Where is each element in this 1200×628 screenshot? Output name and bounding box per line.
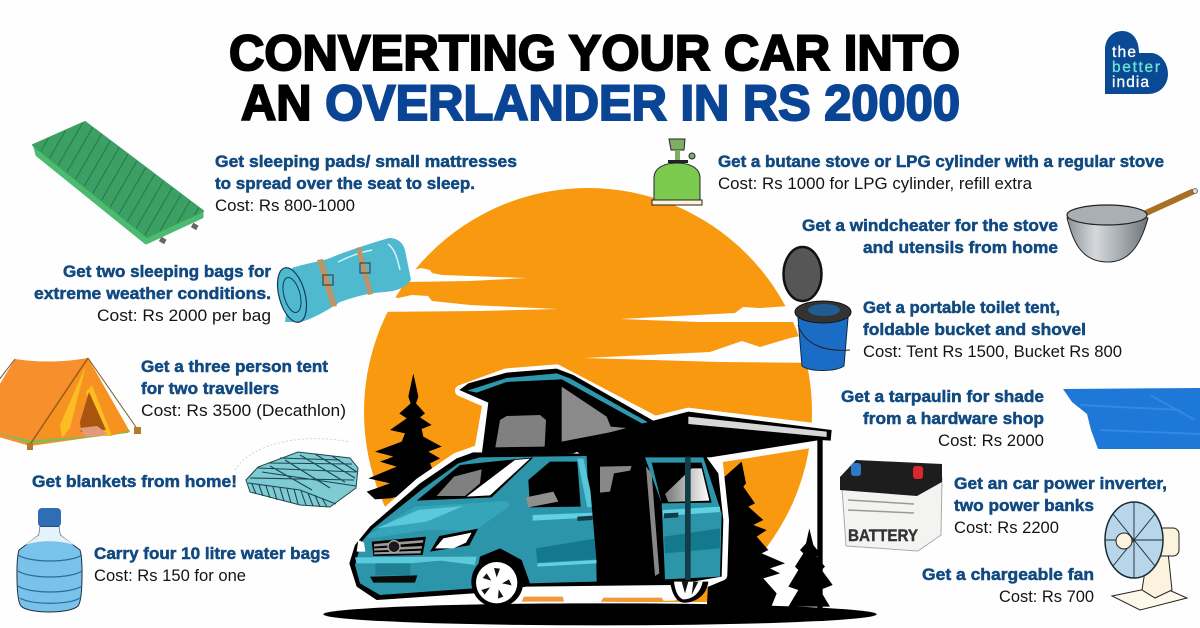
text: stove: Cost: Rs 1000 for LPG cylinder, refill extra [718, 175, 1033, 193]
sun with clouds [364, 188, 820, 628]
title: CONVERTING YOUR CAR INTO [229, 25, 960, 81]
text: water [94, 545, 330, 585]
text: sleeping bags [34, 263, 272, 325]
text: tarpaulin: Get a tarpaulin for shade [841, 388, 1044, 406]
item: sleeping bag [272, 238, 411, 325]
text: sleeping pads: to spread over the seat to sleep. [215, 175, 475, 193]
text: toilet: foldable bucket and shovel [863, 321, 1086, 339]
awning [567, 412, 832, 457]
item: pot [1067, 188, 1198, 262]
item: battery [840, 460, 942, 551]
van body [349, 452, 723, 608]
item: tent [0, 358, 141, 450]
camper van scene [323, 369, 877, 625]
ground shadow [323, 603, 877, 625]
text: fan: Cost: Rs 700 [999, 588, 1094, 606]
text: inverter [954, 475, 1167, 537]
text: inverter: two power banks [954, 497, 1094, 515]
text: fan [922, 566, 1094, 606]
text: tarpaulin: from a hardware shop [863, 410, 1044, 428]
logo: the better india: the [1112, 44, 1136, 61]
orange road strips [522, 597, 664, 602]
title [229, 25, 960, 131]
text: toilet: Get a portable toilet tent, [863, 299, 1060, 317]
text: inverter: Get an car power inverter, [954, 475, 1167, 493]
text: fan: Get a chargeable fan [922, 566, 1094, 584]
text: windcheater: Get a windcheater for the stove [802, 217, 1058, 235]
item: water bottle [17, 508, 82, 612]
text: blankets: Get blankets from home! [32, 473, 237, 491]
rear wheel [670, 582, 708, 603]
item: blankets [235, 439, 358, 507]
pop-up roof [459, 369, 655, 455]
front wheel [471, 556, 523, 608]
van white halo [350, 370, 830, 600]
text: toilet [863, 299, 1122, 361]
grille [372, 537, 426, 556]
text: windcheater: and utensils from home [863, 239, 1058, 257]
text: windcheater [802, 217, 1058, 257]
text: tent: Cost: Rs 3500 (Decathlon) [141, 402, 346, 420]
text: tarpaulin: Cost: Rs 2000 [938, 432, 1044, 450]
item: tarpaulin [1063, 388, 1200, 449]
text: tarpaulin [841, 388, 1044, 450]
text: sleeping bags: Cost: Rs 2000 per bag [97, 307, 271, 325]
text: water: Cost: Rs 150 for one [94, 567, 246, 585]
text: water: Carry four 10 litre water bags [94, 545, 330, 563]
text: stove: Get a butane stove or LPG cylinder with a regular stove [718, 153, 1164, 171]
item: fan [1105, 502, 1187, 610]
small pine tree [788, 528, 833, 607]
logo: the better india: better [1112, 59, 1160, 76]
text: tent: for two travellers [141, 380, 279, 398]
right pine tree [707, 462, 785, 610]
text: sleeping bags: extreme weather conditions. [34, 285, 271, 303]
windshield [417, 457, 533, 501]
text: stove [718, 153, 1164, 193]
bumper slot [370, 575, 417, 583]
rear door [645, 457, 722, 579]
title: AN OVERLANDER IN RS 20000 [241, 75, 960, 131]
sliding door opening [587, 455, 659, 582]
text: sleeping pads [215, 153, 517, 215]
item: sleeping pad [33, 122, 203, 244]
item: stove [652, 139, 702, 205]
text: tent [141, 358, 346, 420]
text: sleeping pads: Cost: Rs 800-1000 [215, 197, 355, 215]
logo: the better india [1105, 31, 1168, 94]
text: sleeping bags: Get two sleeping bags for [63, 263, 272, 281]
hood highlight [366, 501, 510, 538]
front door [532, 507, 597, 582]
headlights [430, 529, 478, 552]
awning pole [817, 438, 823, 608]
text: toilet: Cost: Tent Rs 1500, Bucket Rs 800 [863, 343, 1122, 361]
item: battery: BATTERY [848, 526, 919, 545]
logo: the better india: india [1112, 74, 1149, 91]
left pine tree [367, 373, 442, 499]
text: inverter: Cost: Rs 2200 [954, 519, 1059, 537]
text: sleeping pads: Get sleeping pads/ small mattresses [215, 153, 517, 171]
text: tent: Get a three person tent [141, 358, 329, 376]
item: portable toilet [784, 247, 851, 370]
